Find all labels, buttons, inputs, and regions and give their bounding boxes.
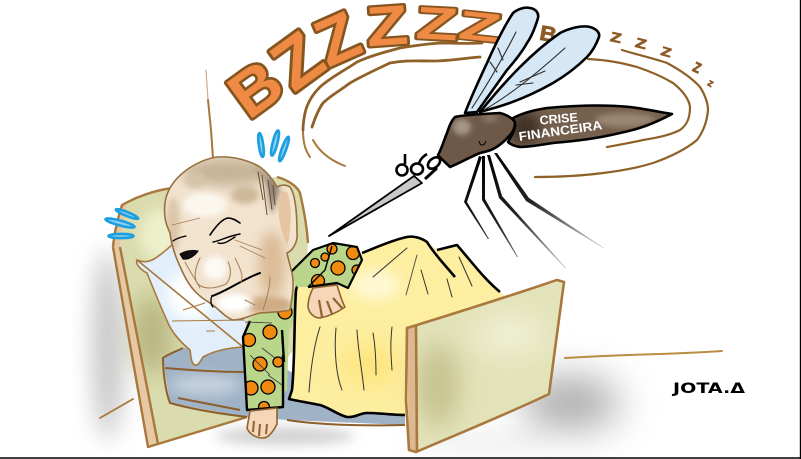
man: raised arm sleeve [290, 243, 362, 288]
mosquito wing back [465, 8, 538, 113]
pillow [137, 245, 250, 365]
footboard [406, 280, 564, 452]
sound effect: BZZZZZ big letters: B [215, 46, 296, 132]
mosquito thorax [438, 113, 515, 167]
sound effect: BZZZZZ big letters: Z [456, 2, 504, 52]
abdomen label: FINANCEIRA [518, 118, 603, 144]
abdomen label [518, 110, 603, 144]
sound effect: fading small letters: B [538, 21, 559, 47]
abdomen label: CRISE [539, 110, 578, 128]
man: torso and hanging arm [242, 287, 298, 412]
mosquito legs [464, 153, 604, 268]
mattress [163, 347, 405, 425]
blanket folds [309, 248, 472, 392]
nose, mouth and wrinkles [172, 218, 270, 310]
hair [252, 165, 280, 215]
sound effect: fading small letters: Z [609, 30, 623, 47]
headboard [113, 177, 308, 447]
mosquito proboscis [329, 176, 422, 236]
sound effect: fading small letters [538, 21, 715, 89]
swoosh trails [303, 43, 708, 177]
ear [278, 191, 291, 245]
wall lines [100, 70, 722, 418]
sound effect: fading small letters: Z [659, 45, 673, 61]
sound effect: fading small letters: Z [690, 59, 704, 76]
signature: JOTA.Δ [672, 381, 745, 397]
mosquito wing front [480, 26, 599, 112]
man: head [165, 157, 297, 320]
blue motion marks: left [105, 208, 139, 238]
wing veins [472, 32, 565, 110]
polka dots on raised sleeve [310, 244, 362, 288]
sound effect: BZZZZZ big letters: Z [304, 0, 371, 81]
sound effect: BZZZZZ big letters [215, 0, 504, 132]
blanket [289, 237, 510, 417]
man: upper hand [308, 285, 345, 318]
blue motion marks: top [257, 130, 291, 162]
sound effect: BZZZZZ big letters: Z [257, 16, 339, 106]
floor and wall shadows [92, 250, 620, 450]
sound effect: fading small letters: Z [706, 79, 715, 89]
polka dots on hanging sleeve [242, 305, 292, 412]
mosquito head and eyes [396, 154, 442, 179]
eyes and brows [173, 218, 240, 259]
sound effect: fading small letters: Z [634, 36, 648, 53]
mosquito abdomen [508, 106, 672, 147]
mosquito [329, 8, 672, 268]
man: lower hand [247, 408, 277, 438]
